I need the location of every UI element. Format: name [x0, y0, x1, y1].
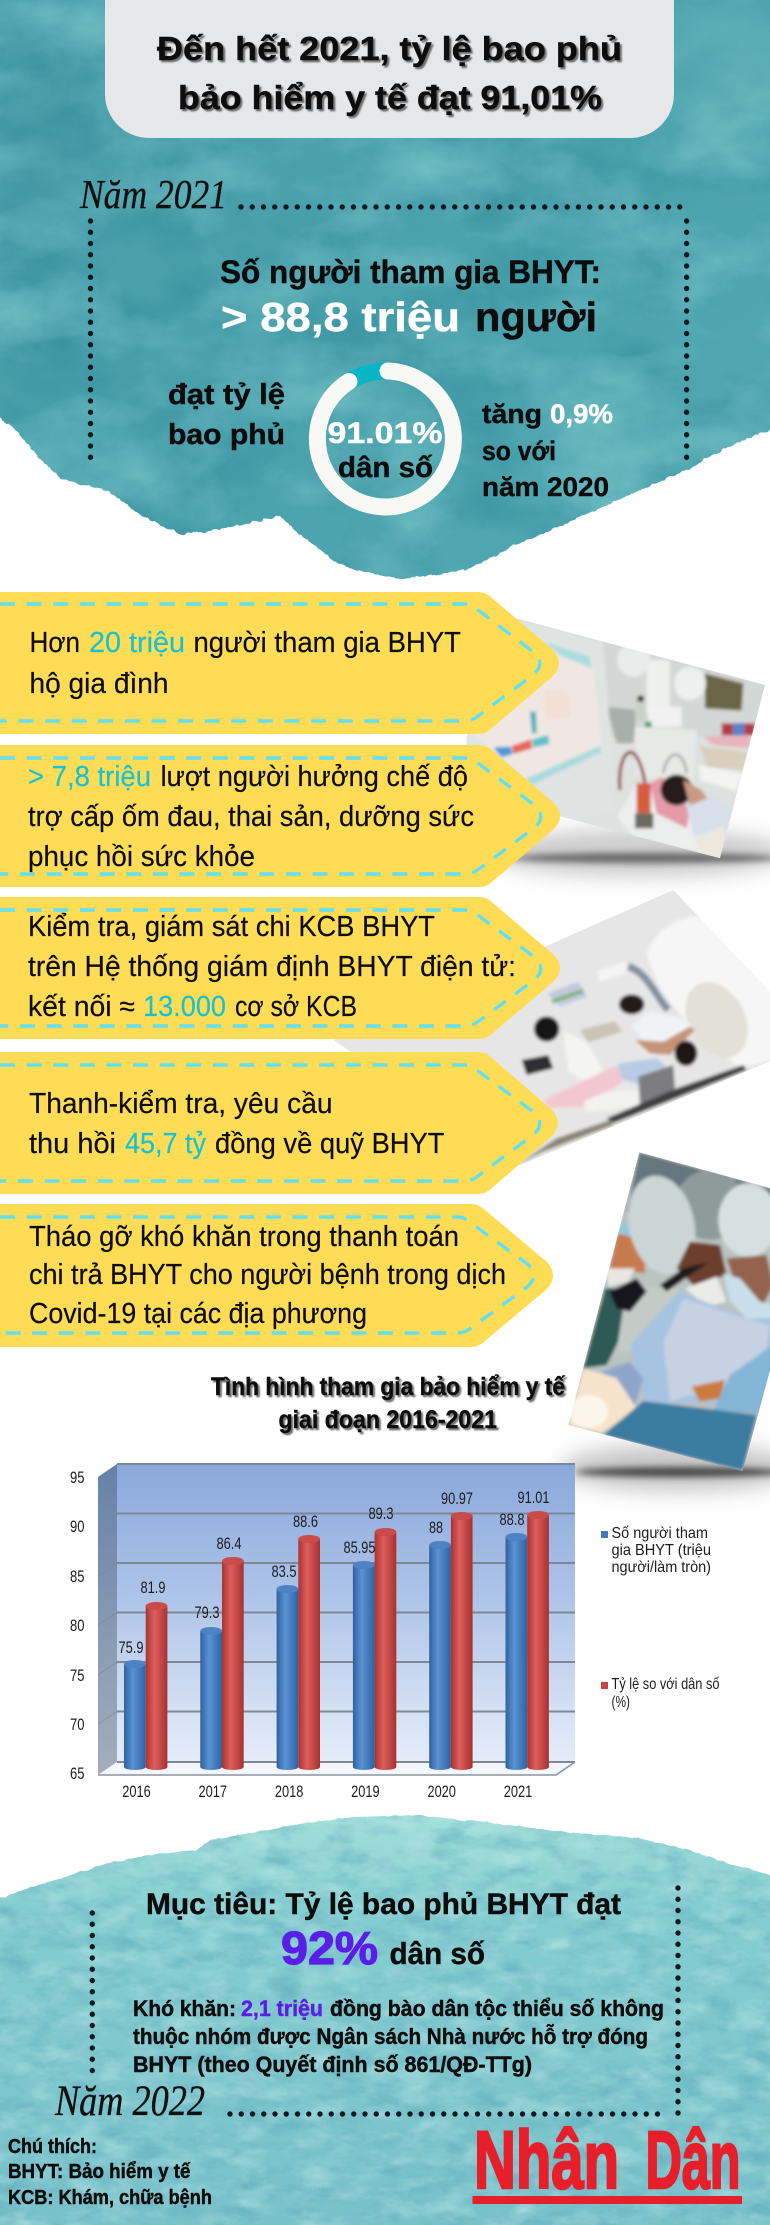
legend: gia BHYT (triệu: [612, 1542, 711, 1559]
banner 4: thu hồi: [29, 1128, 116, 1160]
value labels: 88.6: [293, 1512, 318, 1531]
photo shadow 1: [490, 829, 770, 877]
y axis labels: 70: [70, 1715, 84, 1734]
growth note: tăng: [482, 399, 542, 429]
y axis labels: 95: [70, 1468, 84, 1487]
title panel: bảo hiểm y tế đạt 91,01%: [178, 79, 602, 116]
value labels: 90.97: [441, 1489, 473, 1508]
value labels: 91.01: [518, 1488, 550, 1507]
value labels: 88: [429, 1518, 443, 1537]
bar chart: [70, 1464, 720, 1801]
banner 5: Covid-19 tại các địa phương: [29, 1298, 367, 1330]
value labels: 89.3: [368, 1504, 394, 1523]
y axis labels: 65: [70, 1764, 84, 1783]
banner 1: hộ gia đình: [30, 668, 168, 700]
banner 1: [0, 592, 559, 734]
bars 2018: [277, 1535, 320, 1770]
value labels: 79.3: [194, 1603, 220, 1622]
target figure: 92%: [281, 1922, 378, 1974]
legend: [601, 1525, 720, 1711]
dotted frame 2022: [92, 1888, 678, 2114]
x axis labels: 2019: [351, 1782, 380, 1801]
bars 2017: [200, 1557, 244, 1770]
banner 3: cơ sở KCB: [235, 991, 357, 1023]
year label 2021: Năm 2021: [79, 171, 227, 217]
banner 1: 20 triệu: [89, 627, 185, 659]
target figure: [281, 1922, 485, 1974]
donut chart 91.01%: 91.01%: [328, 417, 442, 450]
photo shadow 3: [560, 1444, 770, 1492]
panel: year 2021: [79, 171, 690, 507]
chart plot walls: [98, 1464, 575, 1775]
x axis labels: 2018: [275, 1782, 303, 1801]
y axis labels: 75: [70, 1666, 84, 1685]
bars 2019: [353, 1528, 396, 1770]
growth note: 0,9%: [550, 399, 613, 429]
legend: (%): [612, 1694, 630, 1711]
glossary note: KCB: Khám, chữa bệnh: [8, 2187, 212, 2209]
banner 4: Thanh-kiểm tra, yêu cầu: [29, 1088, 332, 1120]
banner 3: Kiểm tra, giám sát chi KCB BHYT: [28, 911, 435, 943]
banner 2: phục hồi sức khỏe: [28, 841, 255, 873]
banner 2: lượt người hưởng chế độ: [161, 761, 468, 793]
participants heading: Số người tham gia BHYT:: [220, 254, 601, 290]
glossary note: BHYT: Bảo hiểm y tế: [8, 2161, 191, 2183]
chart title: [211, 1373, 565, 1434]
y axis labels: 85: [70, 1567, 84, 1586]
difficulty note: 2,1 triệu: [241, 1996, 323, 2021]
x axis labels: 2017: [199, 1782, 227, 1801]
banner 5: [0, 1204, 553, 1347]
legend: người/làm tròn): [612, 1559, 711, 1576]
legend: Tỷ lệ so với dân số: [612, 1676, 720, 1693]
banner 3: trên Hệ thống giám định BHYT điện tử:: [28, 951, 516, 983]
banner 1: Hơn: [30, 627, 80, 659]
banner 2: trợ cấp ốm đau, thai sản, dưỡng sức: [28, 801, 474, 833]
banner 1: người tham gia BHYT: [194, 627, 461, 659]
glossary note: Chú thích:: [8, 2136, 97, 2158]
banner 5: chi trả BHYT cho người bệnh trong dịch: [29, 1259, 506, 1291]
title panel: Đến hết 2021, tỷ lệ bao phủ: [157, 30, 622, 67]
glossary note: [8, 2136, 212, 2209]
donut chart 91.01%: dân số: [338, 452, 433, 484]
banner 3: kết nối ≈: [28, 991, 135, 1023]
photo: radiotherapy room: [330, 885, 770, 1172]
value labels: 83.5: [272, 1562, 296, 1581]
x axis labels: [122, 1782, 532, 1801]
bars 2021: [505, 1511, 549, 1770]
year label 2022: Năm 2022: [54, 2078, 205, 2125]
growth note: [482, 399, 613, 502]
legend: Số người tham: [612, 1525, 708, 1542]
participants figure: [221, 294, 597, 340]
participants figure: người: [475, 294, 597, 340]
difficulty note: BHYT (theo Quyết định số 861/QĐ-TTg): [133, 2052, 532, 2077]
dotted frame 2021: [90, 207, 690, 468]
growth note: năm 2020: [482, 472, 609, 502]
coverage label: đạt tỷ lệ: [168, 379, 285, 411]
difficulty note: Khó khăn:: [133, 1996, 236, 2021]
participants figure: > 88,8 triệu: [221, 294, 460, 340]
x axis labels: 2016: [122, 1782, 151, 1801]
x axis labels: 2020: [427, 1782, 456, 1801]
bars 2016: [124, 1602, 167, 1770]
growth note: so với: [482, 436, 556, 466]
panel: year 2022: [54, 1888, 678, 2125]
banner 4: đồng về quỹ BHYT: [215, 1128, 445, 1160]
value labels: 75.9: [118, 1638, 144, 1657]
banner 2: [0, 745, 560, 887]
value labels: 81.9: [140, 1578, 166, 1597]
value labels: 85.95: [344, 1538, 376, 1557]
y axis labels: 80: [70, 1616, 84, 1635]
x axis labels: 2021: [504, 1782, 532, 1801]
banner 2: > 7,8 triệu: [28, 761, 151, 793]
background: top teal watercolor blob: [0, 0, 770, 579]
target heading: Mục tiêu: Tỷ lệ bao phủ BHYT đạt: [146, 1888, 621, 1921]
value labels: 86.4: [216, 1534, 242, 1553]
difficulty note: thuộc nhóm được Ngân sách Nhà nước hỗ trợ đóng: [133, 2024, 648, 2049]
y axis labels: 90: [70, 1517, 84, 1536]
coverage label: bao phủ: [168, 419, 285, 451]
value labels: [118, 1488, 550, 1657]
banner 5: Tháo gỡ khó khăn trong thanh toán: [29, 1221, 459, 1253]
chart title: Tình hình tham gia bảo hiểm y tế: [211, 1373, 565, 1401]
bars 2020: [429, 1512, 473, 1770]
value labels: 88.8: [500, 1510, 524, 1529]
y axis labels: [70, 1468, 84, 1783]
target figure: dân số: [390, 1936, 485, 1971]
logo: Nhân Dân: Nhân: [474, 2115, 619, 2206]
banner 3: 13.000: [143, 991, 226, 1023]
chart title: giai đoạn 2016-2021: [278, 1406, 497, 1434]
banner 4: [0, 1052, 558, 1194]
difficulty note: đồng bào dân tộc thiểu số không: [330, 1996, 664, 2021]
coverage label: [168, 379, 285, 451]
photo: dialysis ward: [466, 618, 765, 858]
photo: surgeons: [560, 1145, 770, 1478]
banner 4: 45,7 tỷ: [125, 1128, 206, 1160]
difficulty note: [133, 1996, 664, 2077]
banner 3: [0, 897, 560, 1039]
background: bottom light teal watercolor blob: [0, 1815, 770, 2225]
title panel: [105, 0, 674, 138]
donut chart 91.01%: [317, 371, 454, 507]
